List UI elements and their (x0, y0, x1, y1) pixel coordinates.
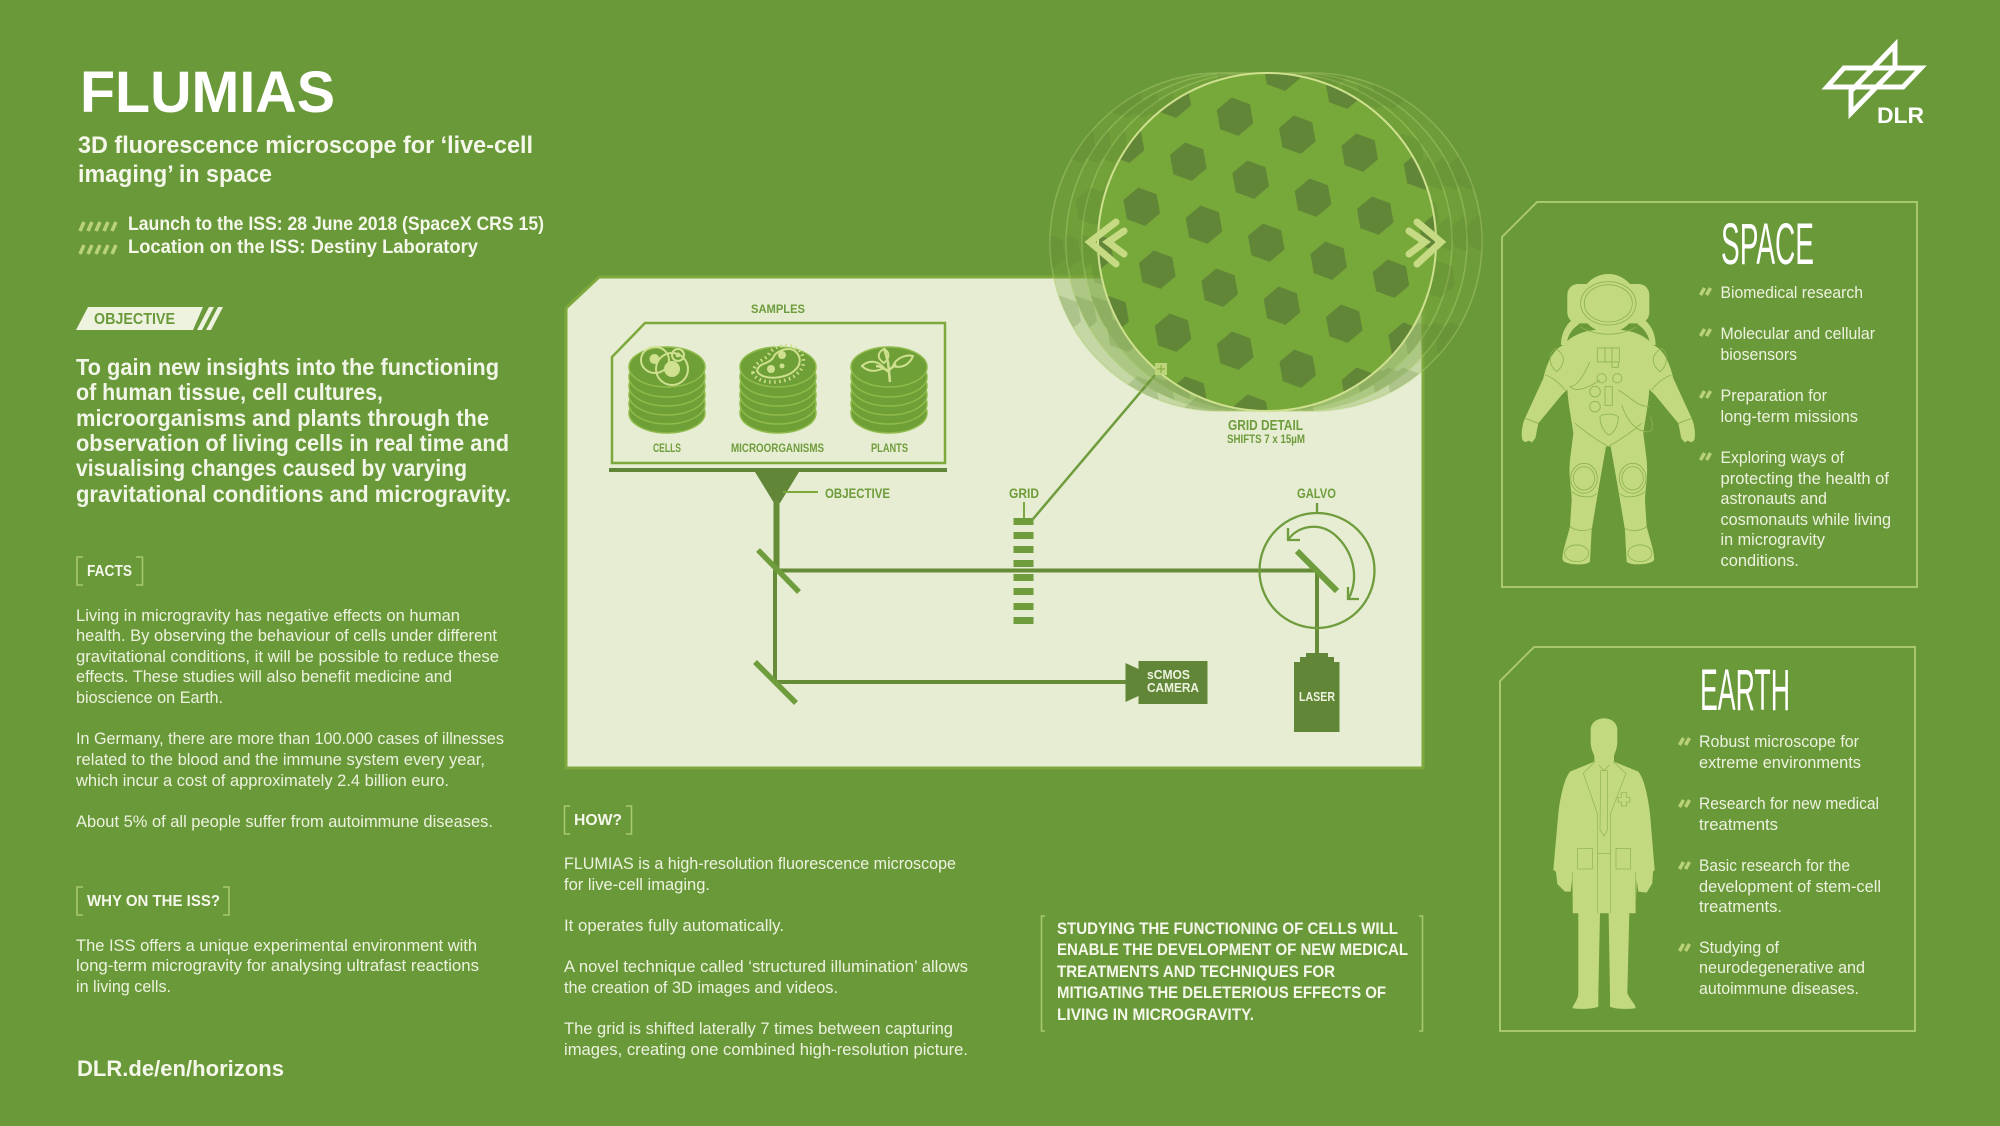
hexagon pattern (1099, 74, 1435, 410)
samples frame (612, 323, 945, 463)
callout (1042, 916, 1422, 1031)
icon: astronaut (1522, 274, 1695, 564)
earth bullet text: treatments. (1699, 897, 1782, 916)
space bullet text: Molecular and cellular (1720, 324, 1875, 343)
space bullet text (1720, 283, 1891, 570)
how text (564, 854, 968, 1059)
logo: DLR: DLR (1877, 103, 1924, 128)
objective text: To gain new insights into the functioning (76, 354, 499, 380)
space bullet marks (1700, 288, 1710, 460)
mirrors (755, 550, 799, 703)
earth bullet text: neurodegenerative and (1699, 958, 1865, 977)
launch details (128, 214, 544, 258)
earth frame (1500, 647, 1915, 1031)
why on the ISS text: in living cells. (76, 977, 171, 996)
grid detail lens with shifted ghost images (1049, 72, 1483, 412)
panel: space (1502, 202, 1917, 587)
grid element: GRID (1009, 485, 1039, 501)
space frame (1502, 202, 1917, 587)
facts text: In Germany, there are more than 100.000 cases of illnesses (76, 729, 504, 748)
facts text: About 5% of all people suffer from autoimmune diseases. (76, 812, 493, 831)
space bullet text: long-term missions (1720, 407, 1858, 426)
why on the ISS heading: WHY ON THE ISS? (87, 893, 220, 910)
website link: DLR.de/en/horizons (77, 1056, 284, 1081)
sample labels: MICROORGANISMS (731, 441, 824, 455)
earth bullet marks (1680, 738, 1690, 951)
stack: plants (851, 347, 927, 433)
how text: It operates fully automatically. (564, 916, 784, 935)
facts text: which incur a cost of approximately 2.4 billion euro. (75, 771, 449, 790)
objective text: visualising changes caused by varying (76, 455, 467, 481)
space bullet text: conditions. (1720, 551, 1799, 570)
earth bullet text: autoimmune diseases. (1699, 979, 1859, 998)
objective text: observation of living cells in real time and (76, 430, 509, 456)
panel: microscope diagram (566, 277, 1423, 768)
launch details: Launch to the ISS: 28 June 2018 (SpaceX CRS 15) (128, 214, 544, 235)
how text: the creation of 3D images and videos. (564, 978, 838, 997)
subtitle (78, 132, 533, 188)
space bullet text: cosmonauts while living (1720, 510, 1891, 529)
subtitle: imaging’ in space (78, 161, 272, 188)
panel: earth: EARTH (1700, 658, 1790, 723)
facts text: related to the blood and the immune system every year, (76, 750, 485, 769)
callout: MITIGATING THE DELETERIOUS EFFECTS OF (1057, 983, 1386, 1002)
facts text: effects. These studies will also benefit medicine and (76, 667, 452, 686)
facts text: health. By observing the behaviour of cells under different (76, 626, 497, 645)
callout: STUDYING THE FUNCTIONING OF CELLS WILL (1057, 919, 1398, 938)
icon: doctor (1553, 718, 1655, 1009)
earth bullet text: Basic research for the (1699, 856, 1850, 875)
launch and location facts (80, 214, 544, 258)
space bullet text: in microgravity (1720, 530, 1825, 549)
facts heading: FACTS (87, 563, 132, 580)
subtitle: 3D fluorescence microscope for ‘live-cell (78, 132, 533, 159)
earth bullet text: extreme environments (1699, 753, 1861, 772)
laser: LASER (1299, 689, 1335, 704)
why on the ISS text: The ISS offers a unique experimental environment with (76, 936, 477, 955)
icon: stripes (80, 222, 116, 254)
sample labels: CELLS (653, 441, 681, 455)
space bullet text: Biomedical research (1720, 283, 1863, 302)
logo: DLR (1827, 45, 1924, 128)
icon: right chevrons (1409, 222, 1441, 264)
how text: for live-cell imaging. (564, 875, 710, 894)
why on the ISS text: long-term microgravity for analysing ultrafast reactions (76, 956, 479, 975)
icon: detail marker (1155, 363, 1167, 375)
facts text: gravitational conditions, it will be possible to reduce these (76, 647, 499, 666)
why on the ISS heading (77, 887, 229, 915)
objective tag (76, 307, 223, 330)
objective lens: OBJECTIVE (825, 485, 890, 501)
facts text: Living in microgravity has negative effects on human (76, 606, 460, 625)
galvo (1260, 485, 1374, 628)
galvo: GALVO (1297, 485, 1336, 501)
samples group (612, 302, 945, 463)
sample labels (653, 441, 908, 455)
grid detail label: GRID DETAIL (1228, 418, 1303, 434)
samples label: SAMPLES (751, 302, 805, 316)
how heading (564, 806, 632, 834)
launch details: Location on the ISS: Destiny Laboratory (128, 237, 478, 258)
sCMOS camera (1126, 661, 1208, 704)
facts text: bioscience on Earth. (76, 688, 223, 707)
objective text: of human tissue, cell cultures, (76, 379, 383, 405)
panel: space: SPACE (1721, 212, 1814, 277)
laser (1294, 653, 1340, 732)
earth bullet text: Research for new medical (1699, 794, 1879, 813)
stack: cells (629, 347, 705, 433)
earth bullet text: treatments (1699, 815, 1778, 834)
facts heading (77, 557, 142, 585)
callout: TREATMENTS AND TECHNIQUES FOR (1057, 962, 1335, 981)
grid element (1009, 375, 1155, 624)
stack: microorganisms (740, 345, 816, 433)
facts text (75, 606, 504, 831)
why on the ISS text (76, 936, 479, 996)
circle outline (1098, 73, 1436, 411)
how text: FLUMIAS is a high-resolution fluorescence microscope (564, 854, 956, 873)
objective text: microorganisms and plants through the (76, 405, 489, 431)
ghost circles (1049, 72, 1483, 412)
main circle (1098, 73, 1436, 411)
earth bullet text (1699, 732, 1881, 998)
callout: LIVING IN MICROGRAVITY. (1057, 1005, 1254, 1024)
callout: ENABLE THE DEVELOPMENT OF NEW MEDICAL (1057, 940, 1408, 959)
objective text (76, 354, 511, 507)
sample stage bar (609, 468, 947, 472)
how text: A novel technique called ‘structured illumination’ allows (564, 957, 968, 976)
sample labels: PLANTS (871, 441, 908, 455)
grid detail label (1227, 418, 1305, 446)
panel: earth (1500, 647, 1915, 1031)
optical beam paths (775, 500, 1318, 684)
icon: left chevrons (1090, 222, 1124, 264)
how text: images, creating one combined high-resolution picture. (564, 1040, 968, 1059)
sCMOS camera: CAMERA (1147, 680, 1200, 695)
space bullet text: protecting the health of (1720, 469, 1889, 488)
space bullet text: biosensors (1720, 345, 1797, 364)
objective tag: OBJECTIVE (94, 311, 175, 328)
space bullet text: Preparation for (1720, 386, 1827, 405)
grid detail label: SHIFTS 7 x 15µM (1227, 434, 1305, 446)
sCMOS camera: sCMOS (1147, 667, 1190, 682)
objective lens (755, 472, 890, 503)
objective text: gravitational conditions and microgravity. (76, 481, 511, 507)
earth bullet text: Studying of (1699, 938, 1779, 957)
space bullet text: astronauts and (1720, 489, 1827, 508)
earth bullet text: Robust microscope for (1699, 732, 1859, 751)
space bullet text: Exploring ways of (1720, 448, 1844, 467)
how text: The grid is shifted laterally 7 times between capturing (564, 1019, 953, 1038)
how heading: HOW? (574, 812, 622, 829)
earth bullet text: development of stem-cell (1699, 877, 1881, 896)
title: FLUMIAS (80, 60, 335, 125)
